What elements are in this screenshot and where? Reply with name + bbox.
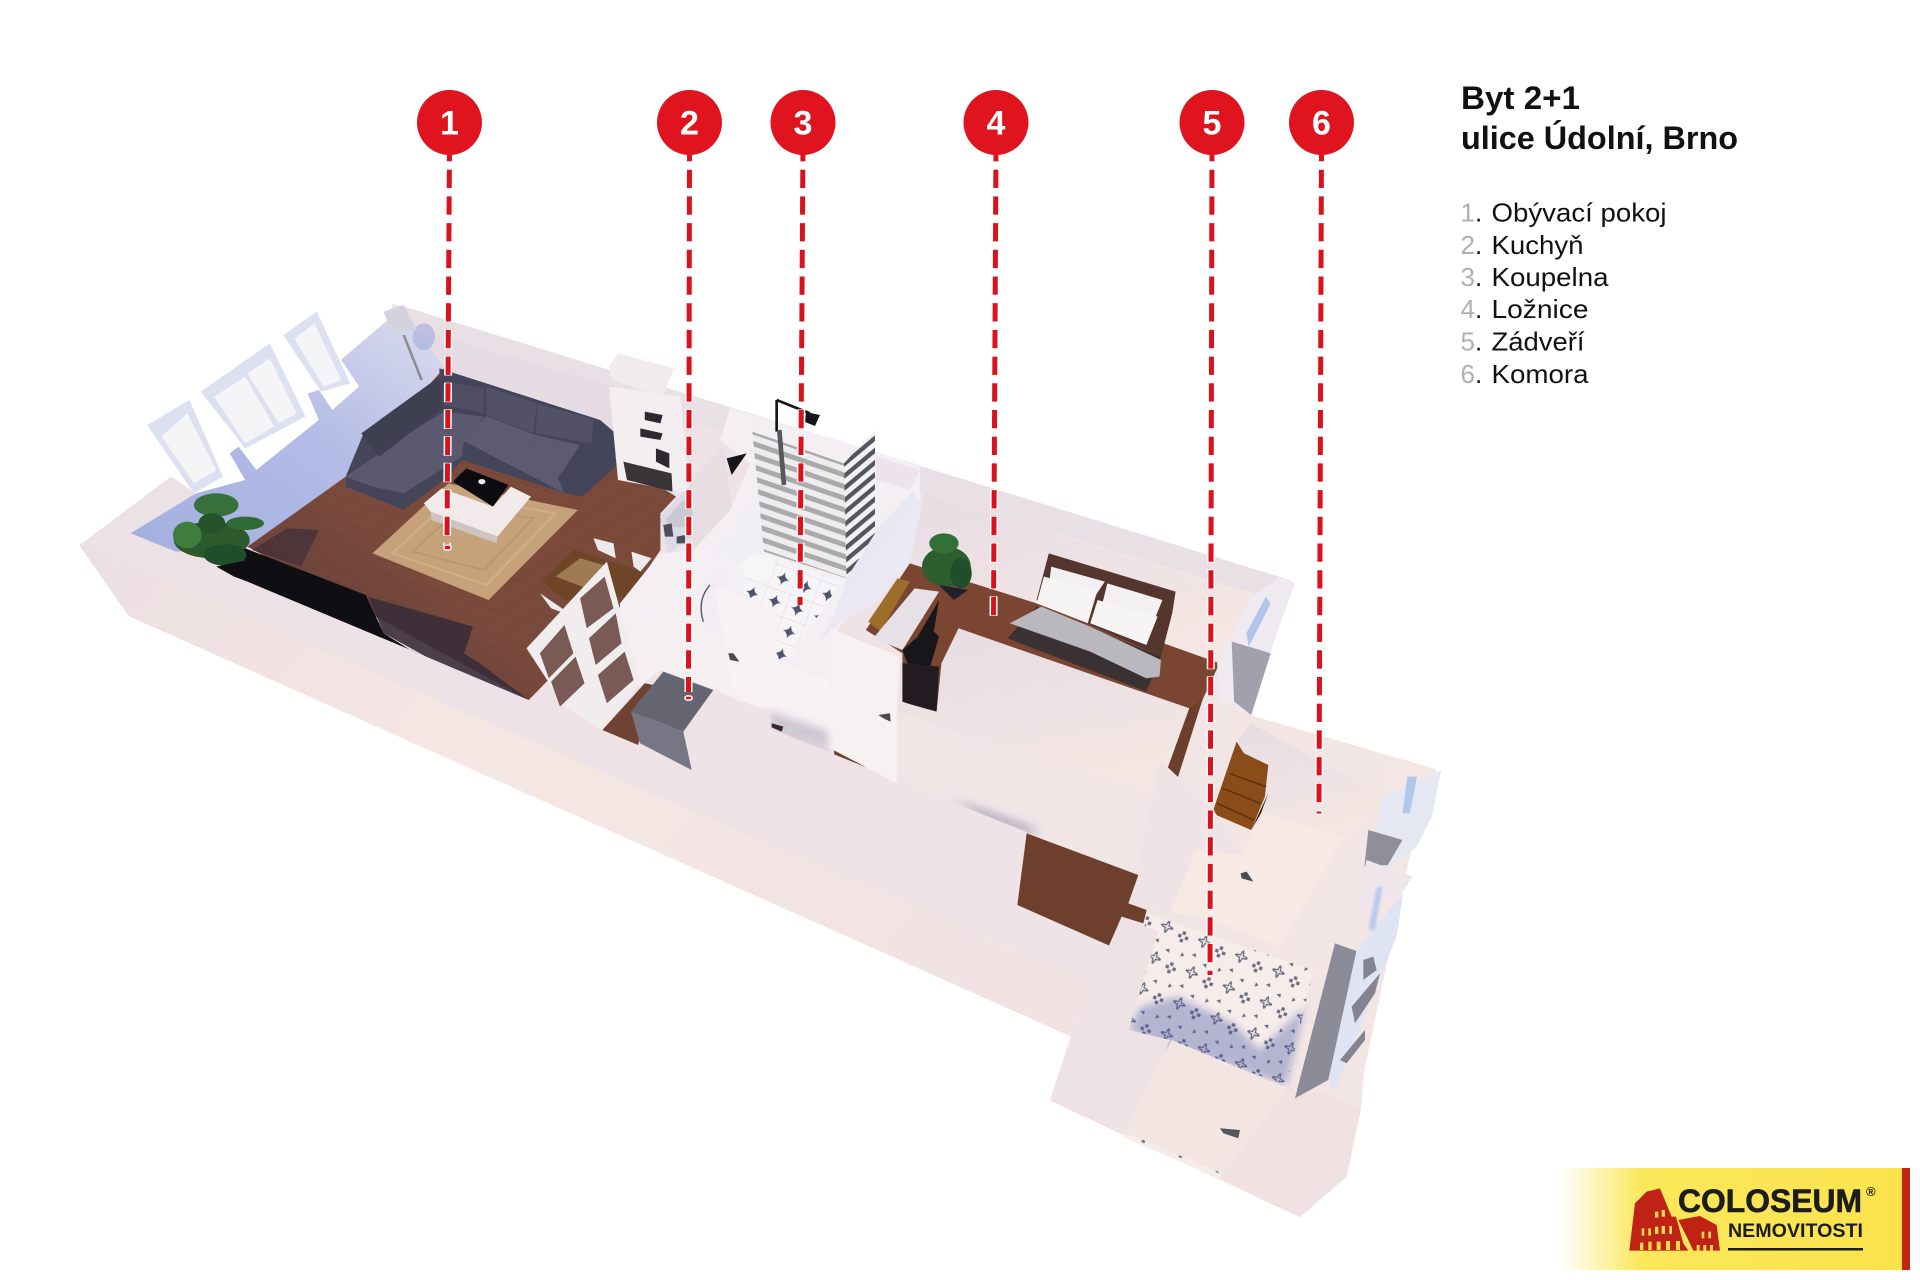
bedroom door — [830, 628, 900, 783]
shower enclosure front glass — [752, 432, 847, 578]
number marker 1: 1 — [440, 104, 459, 142]
room legend: 2. — [1460, 230, 1482, 260]
number marker 3 — [770, 90, 836, 155]
floor plan 3D illustration — [80, 304, 1441, 1217]
toilet tank — [723, 565, 745, 590]
front door — [1123, 1040, 1288, 1178]
floor sliver right of bedroom wall — [1158, 700, 1202, 800]
shower head — [777, 400, 820, 432]
floor lamp — [384, 305, 435, 380]
room legend: 1. — [1460, 198, 1482, 228]
number marker 5: 5 — [1203, 104, 1221, 142]
left corner wall — [623, 612, 655, 687]
outer building silhouette — [80, 304, 1436, 1217]
bathroom door — [716, 587, 833, 750]
number marker 5 — [1180, 90, 1244, 155]
three windows — [147, 312, 350, 493]
room legend: Koupelna — [1492, 262, 1609, 292]
title — [1461, 80, 1738, 156]
patterned hall tiles — [1128, 913, 1313, 1085]
room legend: Kuchyň — [1492, 230, 1584, 260]
number marker 2 — [657, 90, 722, 155]
kitchen side door — [647, 615, 730, 692]
bathroom tiled floor — [738, 553, 842, 660]
towel rail glass panel — [660, 480, 702, 553]
room legend: Komora — [1492, 359, 1589, 389]
number marker 1 — [417, 90, 482, 155]
corner sofa — [346, 368, 616, 510]
outer front face — [80, 545, 1092, 1036]
wall block beside hall — [1280, 883, 1355, 967]
callout line 4 — [994, 143, 996, 617]
number marker 6 — [1289, 90, 1354, 155]
jute rug — [372, 483, 578, 600]
door handle — [1220, 1128, 1240, 1138]
room legend: 6. — [1460, 359, 1482, 389]
tv shadow on floor — [368, 597, 529, 700]
large window frame — [1328, 893, 1403, 1093]
corridor wall — [895, 712, 1163, 873]
number marker 6: 6 — [1312, 104, 1331, 142]
room legend: Zádveří — [1492, 326, 1585, 356]
door handle — [1241, 872, 1253, 882]
corridor wall shadow — [954, 798, 1037, 837]
front left wall block — [1050, 917, 1170, 1135]
large window slab — [1295, 943, 1358, 1098]
corridor shadow — [767, 710, 830, 750]
pantry door — [1220, 813, 1343, 947]
bedroom front wall — [898, 628, 1189, 797]
inner hall wall panel — [1170, 850, 1242, 923]
dark slot — [772, 723, 783, 732]
bedroom door and grey box — [631, 628, 900, 783]
black towel — [727, 453, 747, 475]
plant in living room — [173, 493, 264, 583]
toilet — [740, 552, 775, 580]
right windows of pantry — [1364, 770, 1441, 867]
tile glimpse under door — [1123, 1132, 1222, 1179]
bedroom back wall — [910, 493, 1251, 663]
wooden floor — [247, 368, 676, 700]
room legend: 3. — [1460, 262, 1482, 292]
bathroom door handle — [728, 653, 739, 662]
dark corridor floor strip — [834, 750, 895, 781]
grey box front — [631, 712, 692, 770]
title: Byt 2+1 — [1461, 80, 1580, 116]
callout line 6 — [1316, 143, 1322, 814]
callout line 3 — [800, 143, 803, 605]
room legend: Ložnice — [1492, 294, 1588, 324]
wooden stairs — [1212, 742, 1268, 830]
desk with chair — [868, 578, 939, 712]
callout line 1 — [444, 143, 451, 550]
upper right window block — [1355, 860, 1413, 912]
glass double door — [526, 562, 640, 730]
room legend: Obývací pokoj — [1492, 198, 1666, 228]
logo wordmark: COLOSEUM — [1678, 1183, 1862, 1219]
entrance hall — [1017, 760, 1413, 1217]
dining table and chairs — [540, 538, 651, 617]
grey box top — [631, 672, 713, 732]
room legend — [1460, 198, 1666, 389]
room legend: 5. — [1460, 326, 1482, 356]
bathtub — [697, 567, 723, 630]
pantry back wall — [1237, 723, 1383, 843]
logo underline — [1728, 1248, 1863, 1250]
living room — [131, 305, 689, 745]
back wall face — [417, 330, 676, 497]
right bedroom window — [1217, 577, 1295, 715]
floor behind door — [602, 683, 654, 745]
coffee table — [424, 468, 531, 543]
number marker 4: 4 — [987, 104, 1006, 142]
double bed — [1007, 553, 1176, 692]
window wall with blue shade — [131, 320, 444, 552]
bedroom door handle — [878, 713, 891, 722]
hall white walls — [1130, 760, 1243, 923]
bedroom wood floor — [866, 563, 1220, 800]
back wall patch — [875, 457, 920, 490]
shower enclosure side glass — [844, 430, 875, 578]
bookshelf with air conditioner — [609, 353, 689, 493]
front right wall block — [1220, 1088, 1361, 1217]
wood floor corridor — [1017, 833, 1147, 946]
partition blue side — [817, 490, 920, 643]
partition wall side — [817, 493, 924, 643]
callout line 5 — [1210, 143, 1212, 975]
title: ulice Údolní, Brno — [1461, 120, 1738, 156]
logo badge — [1560, 1168, 1910, 1270]
white partition walls — [620, 408, 920, 750]
tv unit — [241, 547, 431, 658]
central front wall block — [689, 693, 1108, 985]
back wall top tone — [404, 306, 1292, 603]
room legend: 4. — [1460, 294, 1482, 324]
number marker 3: 3 — [794, 104, 812, 142]
bedroom and pantry — [817, 493, 1441, 873]
number marker 2: 2 — [680, 104, 699, 142]
shower mixer pipe — [779, 430, 784, 485]
logo subtitle: NEMOVITOSTI — [1728, 1220, 1863, 1242]
callout line 2 — [685, 143, 692, 700]
white glass partition panel — [692, 448, 732, 550]
bedroom plant — [922, 533, 972, 600]
colosseum icon — [1629, 1188, 1720, 1251]
bathroom white floor shade — [712, 493, 763, 565]
bathroom zone — [620, 400, 920, 750]
number marker 4 — [964, 90, 1028, 155]
registered mark: ® — [1866, 1184, 1876, 1199]
